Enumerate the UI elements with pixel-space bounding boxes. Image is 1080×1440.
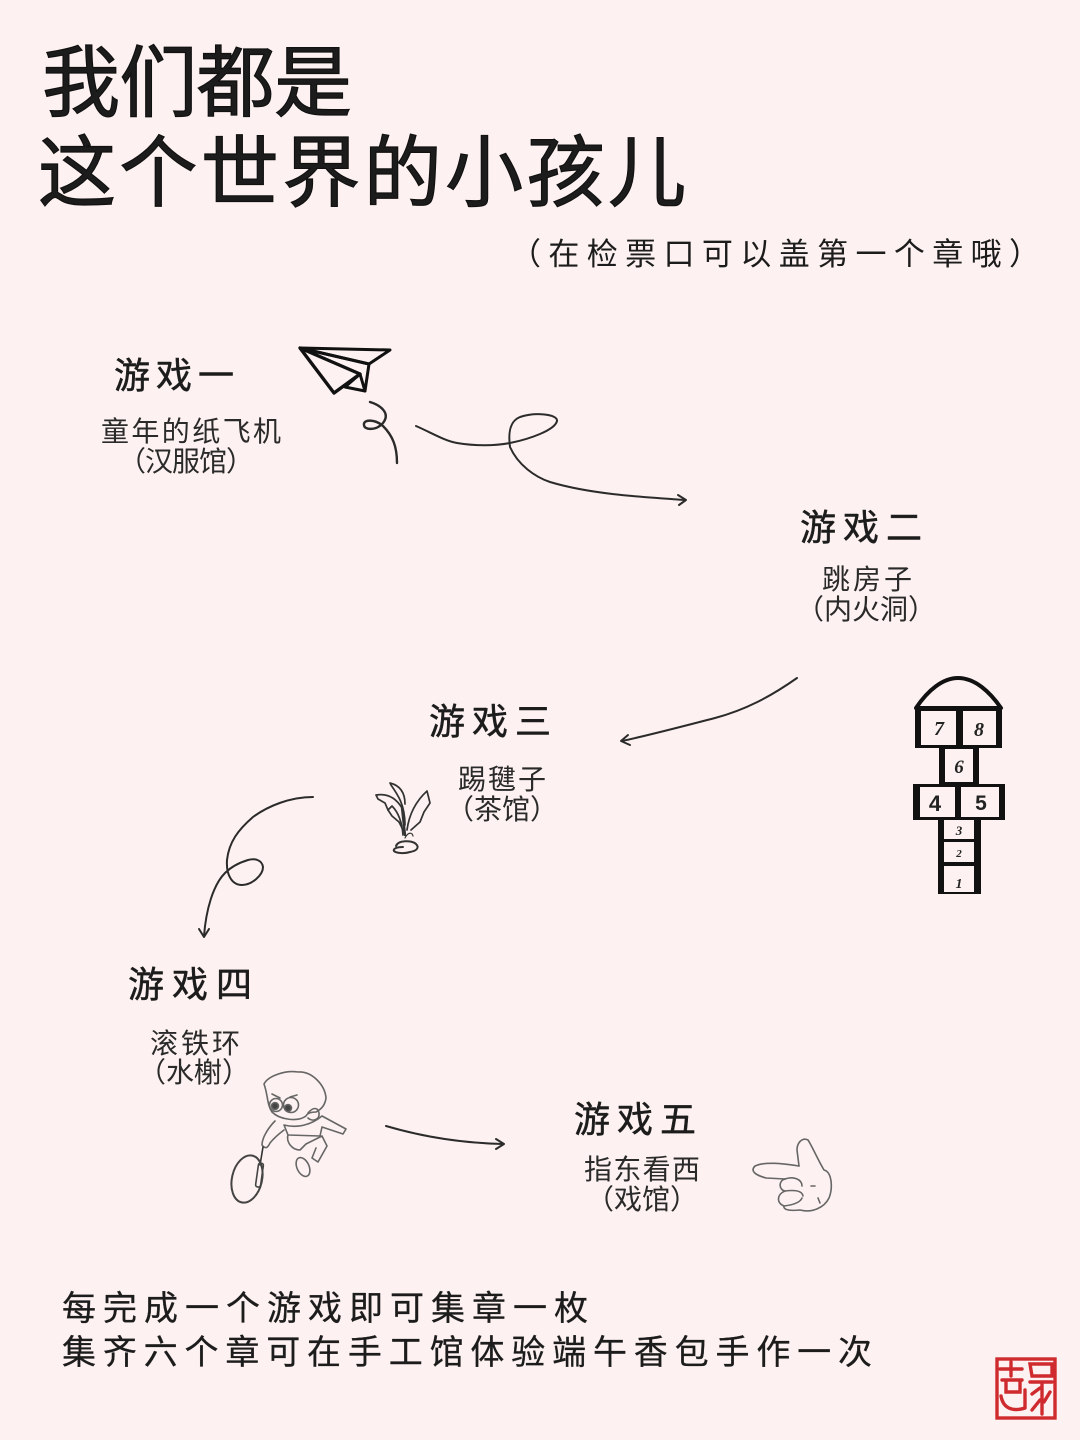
icon: hopscotch grid [913,678,1005,894]
icon: shuttlecock [376,783,430,853]
footer note: 每完成一个游戏即可集章一枚 [62,1290,588,1328]
icon: hopscotch grid: 7 [934,718,945,740]
game five label: 指东看西 [584,1154,700,1185]
game one label: 童年的纸飞机 [101,416,281,447]
icon: hopscotch grid: 1 [956,877,962,892]
game four label: （水榭） [138,1057,250,1088]
red seal stamp [997,1359,1055,1418]
game three label: 踢毽子 [458,764,546,795]
game three label: （茶馆） [446,794,558,825]
icon: hopscotch grid: 5 [975,792,987,815]
icon: boy rolling hoop [227,1072,346,1206]
footer note: 集齐六个章可在手工馆体验端午香包手作一次 [62,1334,872,1372]
title: 我们都是 [42,39,352,127]
curved arrow: plane flight to game two [364,402,686,505]
icon: hopscotch grid: 6 [954,757,964,778]
game one label [101,355,281,477]
icon: hopscotch grid: 4 [929,791,942,816]
icon: pointing hand [753,1139,831,1211]
arrow: game four to game five [386,1126,504,1149]
game five label [574,1099,700,1215]
footer note [62,1290,872,1372]
icon: hopscotch grid: 8 [974,719,984,741]
arrow: game two to game three [621,678,797,745]
game five label: 游戏五 [574,1099,696,1140]
game five label: （戏馆） [586,1184,698,1215]
game three label: 游戏三 [429,701,551,742]
curved arrow: game three to game four [199,797,313,937]
game two label [796,507,936,625]
game two label: 跳房子 [822,564,912,595]
icon: hopscotch grid: 3 [955,823,963,838]
game two label: 游戏二 [800,507,922,548]
subtitle note: （在检票口可以盖第一个章哦） [510,237,1040,272]
icon: paper plane [300,348,390,393]
game four label: 滚铁环 [150,1028,240,1059]
title [38,39,686,217]
game four label: 游戏四 [128,964,252,1005]
game one label: 游戏一 [114,355,234,396]
game three label [429,701,558,825]
title: 这个世界的小孩儿 [38,129,686,217]
game four label [128,964,252,1088]
icon: hopscotch grid: 2 [955,848,962,860]
game two label: （内火洞） [796,594,936,625]
game one label: （汉服馆） [118,446,254,477]
